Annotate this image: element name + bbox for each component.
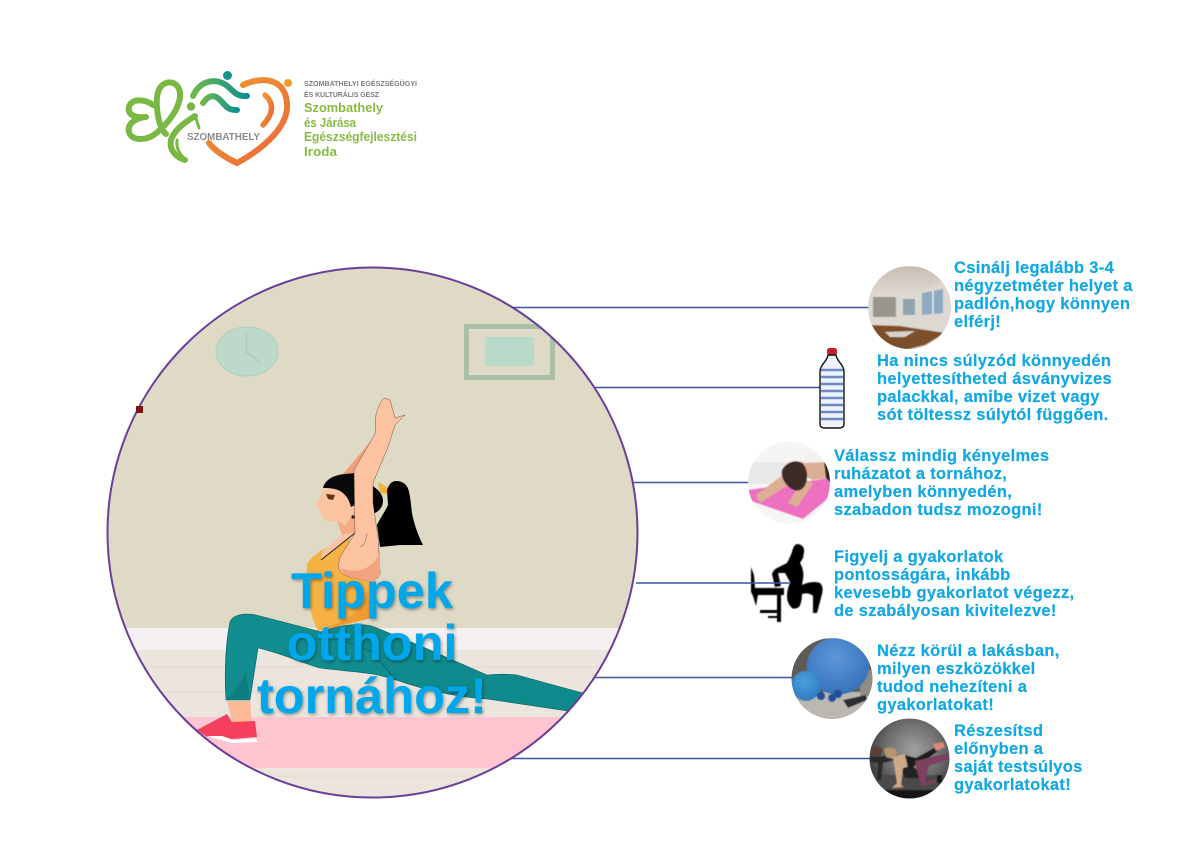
tip 6 text: gyakorlatokat! — [954, 776, 1071, 794]
rear arm — [343, 442, 370, 474]
tip 4 text: Figyelj a gyakorlatok — [834, 548, 1004, 566]
armpit detail — [360, 533, 367, 547]
tip 3 text: ruházatot a tornához, — [834, 465, 1007, 483]
raised arm — [338, 398, 405, 582]
main title: otthoni — [286, 614, 458, 671]
tip 4 text: pontosságára, inkább — [834, 566, 1011, 584]
wall picture — [466, 326, 552, 378]
main title: tornához! — [257, 667, 487, 724]
small red marker — [136, 406, 143, 413]
tip 4 text — [834, 548, 1074, 620]
logo organisation text: SZOMBATHELYI EGÉSZSÉGÜGYI — [304, 79, 417, 88]
woman doing dips — [772, 544, 823, 613]
tip 5 text — [877, 642, 1060, 714]
tip 4: exercise silhouette — [751, 544, 823, 622]
logo mark: green letters — [129, 82, 199, 160]
logo organisation text: Egészségfejlesztési — [304, 129, 417, 144]
tip 1 text: elférj! — [954, 313, 1001, 331]
yoga woman — [197, 398, 590, 743]
circle outline — [108, 268, 638, 798]
leggings: rear leg — [320, 625, 590, 712]
wall clock — [216, 327, 278, 376]
yoga mat — [184, 717, 561, 768]
tip 6 text: saját testsúlyos — [954, 758, 1083, 776]
ankle — [227, 701, 252, 723]
background woman — [870, 755, 895, 780]
logo organisation text: és Járása — [304, 115, 357, 130]
logo organisation text: Szombathely — [304, 100, 384, 115]
tip 1: room photo — [868, 266, 952, 350]
scrunchie — [378, 482, 387, 494]
hair bun — [373, 486, 383, 514]
dip chair — [751, 567, 784, 622]
shoe — [197, 714, 257, 739]
tip 1 text — [954, 259, 1133, 331]
tip 6: bodyweight exercise photo — [869, 718, 950, 799]
tip 5: fitness balls photo — [791, 638, 874, 720]
face and neck — [316, 488, 354, 560]
room background — [100, 260, 645, 800]
yellow top — [307, 538, 372, 631]
main title: Tippek — [291, 562, 454, 619]
tip 2 text — [877, 352, 1112, 424]
earring — [351, 515, 355, 519]
tip 6 text: Részesítsd — [954, 722, 1043, 740]
tip 5 text: tudod nehezíteni a — [877, 678, 1028, 696]
ponytail — [377, 481, 423, 547]
main circle illustration — [100, 260, 645, 800]
infographic — [106, 71, 1133, 798]
tip 3 text — [834, 447, 1049, 519]
tip 2 text: sót töltessz súlytól függően. — [877, 406, 1108, 424]
hair — [323, 473, 355, 507]
logo organisation text — [304, 79, 417, 159]
tip 5 text: gyakorlatokat! — [877, 696, 994, 714]
logo organisation text: ÉS KULTURÁLIS GESZ — [304, 90, 380, 99]
tip 4 text: de szabályosan kivitelezve! — [834, 602, 1057, 620]
logo — [129, 71, 417, 163]
logo wordmark: SZOMBATHELY — [187, 131, 260, 143]
tip 2: water bottle — [820, 348, 844, 428]
tip 1 text: padlón,hogy könnyen — [954, 295, 1130, 313]
eye — [326, 494, 335, 500]
logo dots and waves — [187, 71, 292, 163]
tip 4 text: kevesebb gyakorlatot végezz, — [834, 584, 1074, 602]
foreground woman — [884, 747, 897, 759]
tip 2 text: Ha nincs súlyzód könnyedén — [877, 352, 1111, 370]
tip 3: stretching woman photo — [748, 441, 832, 525]
tip 6 text — [954, 722, 1083, 794]
tip 3 text: szabadon tudsz mozogni! — [834, 501, 1043, 519]
tip 6 text: előnyben a — [954, 740, 1044, 758]
neckline stroke — [321, 533, 355, 560]
logo organisation text: Iroda — [304, 144, 338, 159]
tip 2 text: palackkal, amibe vizet vagy — [877, 388, 1100, 406]
tip 1 text: Csinálj legalább 3-4 — [954, 259, 1115, 277]
tip 1 text: négyzetméter helyet a — [954, 277, 1133, 295]
tip 2 text: helyettesítheted ásványvizes — [877, 370, 1112, 388]
tip 5 text: milyen eszközökkel — [877, 660, 1036, 678]
main title — [257, 562, 487, 724]
leggings: front leg — [225, 614, 396, 700]
connector lines — [510, 308, 870, 758]
tip 3 text: amelyben könnyedén, — [834, 483, 1012, 501]
tip 3 text: Válassz mindig kényelmes — [834, 447, 1049, 465]
tip 5 text: Nézz körül a lakásban, — [877, 642, 1060, 660]
